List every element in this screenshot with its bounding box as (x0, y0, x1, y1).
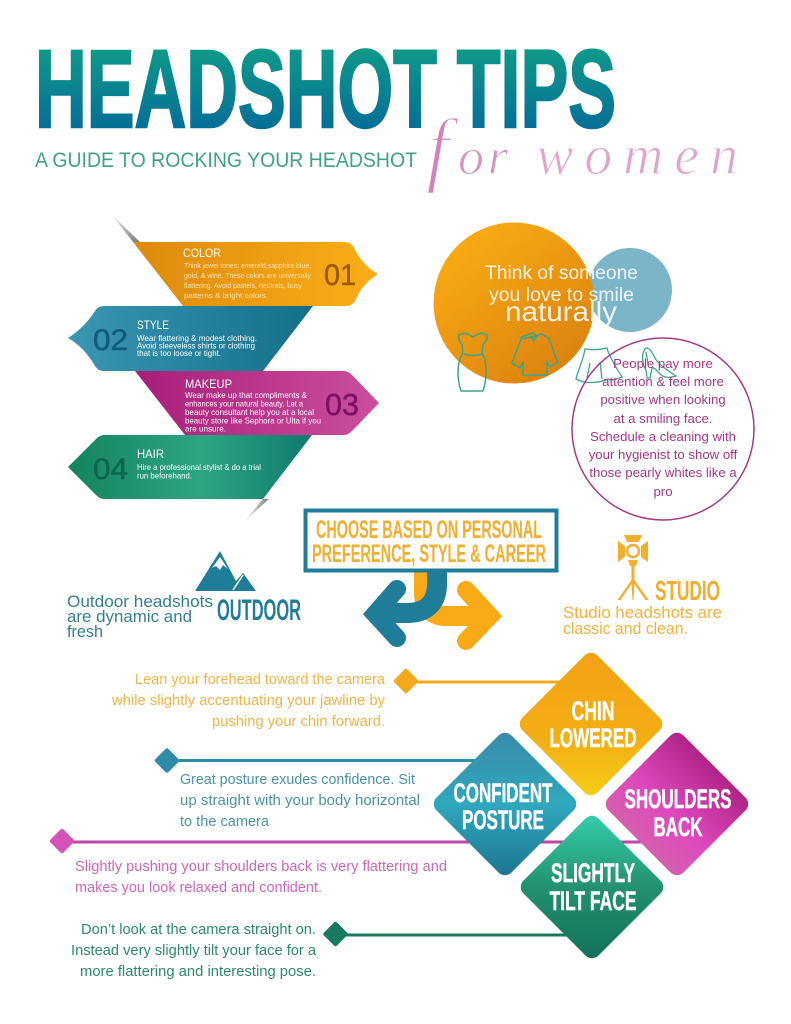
ribbon: makeup: are unsure. (185, 424, 226, 434)
ribbon: color: patterns & bright colors. (184, 291, 268, 300)
panel: numbered ribbons (68, 213, 379, 523)
ribbon: makeup: MAKEUP (185, 379, 232, 391)
arrow: teal left (373, 572, 437, 638)
ribbon: style: that is too loose or tight. (137, 349, 221, 358)
choose text: CHOOSE BASED ON PERSONAL (316, 516, 542, 544)
teal circle (588, 248, 672, 332)
tip text: posture: to the camera (180, 814, 270, 830)
tip text: tilt: Don’t look at the camera straight on. (81, 922, 316, 938)
icon: studio light (618, 535, 648, 600)
ribbon: hair: 04 (93, 453, 128, 486)
panel: studio (563, 535, 722, 638)
ribbon: hair (68, 435, 312, 499)
script heading: for women: f (426, 102, 460, 195)
arrow: orange right (424, 572, 490, 641)
ribbon: color: gold, & wine. These colors are universally (184, 271, 311, 280)
circle text: attention & feel more (602, 374, 724, 389)
diamond: chin lowered (516, 649, 666, 799)
tip text: posture: Great posture exudes confidence. Sit (180, 772, 415, 788)
subtitle: A GUIDE TO ROCKING YOUR HEADSHOT (35, 149, 417, 172)
ribbon: makeup: enhances your natural beauty. Let a (185, 400, 303, 408)
circle text: your hygienist to show off (589, 447, 738, 462)
script heading: for women: women (536, 125, 738, 187)
circle text: People pay more (613, 356, 713, 371)
tip text: chin: Lean your forehead toward the camera (135, 672, 386, 688)
tip text: shoulders: makes you look relaxed and confident. (75, 880, 322, 896)
diamond: slightly tilt face: SLIGHTLY (551, 858, 635, 888)
icon: dress (458, 333, 487, 391)
tip text: posture: up straight with your body horizontal (180, 793, 420, 809)
ribbon: color: flattering. Avoid pastels, neutrals, busy (184, 281, 302, 290)
circle text: at a smiling face. (614, 411, 712, 426)
ribbon: hair: run beforehand. (137, 470, 192, 480)
outdoor text: fresh (67, 622, 103, 641)
connector: teal (154, 747, 482, 774)
ribbon: style: Wear flattering & modest clothing. (137, 334, 257, 343)
ribbon: makeup: Wear make up that compliments & (185, 391, 308, 400)
tip text: chin: while slightly accentuating your jawline by (111, 693, 386, 709)
diamond: chin lowered: LOWERED (550, 723, 636, 753)
choose box (306, 510, 556, 570)
circle text: those pearly whites like a (589, 465, 737, 480)
ribbon: makeup: 03 (325, 387, 359, 422)
icon: skirt top (576, 348, 622, 383)
ribbon: hair: Hire a professional stylist & do a trial (137, 462, 261, 472)
icon: shoe (643, 348, 676, 378)
connector: green (322, 921, 570, 947)
ribbon: color: 01 (324, 259, 356, 292)
connector: yellow (393, 668, 565, 694)
ribbon: style (68, 306, 313, 371)
icon: blouse (512, 333, 558, 375)
ribbon: color (133, 242, 378, 306)
purple text circle (572, 338, 754, 520)
panel: smile circles (434, 222, 754, 520)
ribbon: hair: HAIR (137, 449, 164, 461)
outdoor text: Outdoor headshots (67, 592, 213, 611)
tip text: shoulders: Slightly pushing your shoulders back is very flattering and (75, 859, 447, 875)
ribbon: style: Avoid sleeveless shirts or clothing (137, 342, 255, 350)
diamond: confident posture: CONFIDENT (454, 778, 553, 808)
panel: choose box and arrows (306, 510, 556, 641)
tip text: tilt: Instead very slightly tilt your face for a (71, 943, 317, 959)
diamond: slightly tilt face: TILT FACE (550, 886, 636, 916)
panel: outdoor (67, 551, 301, 641)
circle text: Schedule a cleaning with (590, 429, 736, 444)
ribbon: color: COLOR (183, 248, 221, 260)
smile text: Think of someone (485, 263, 638, 284)
script heading: for women (426, 102, 738, 195)
connector: magenta (49, 828, 642, 854)
diamond: chin lowered: CHIN (572, 696, 614, 726)
icon: mountain (195, 551, 256, 591)
panel: choose box and arrows: PREFERENCE, STYLE & CAREER (312, 540, 546, 568)
diamond: shoulders back: SHOULDERS (624, 784, 732, 814)
diamond: slightly tilt face (517, 812, 667, 962)
smile text: you love to smile (489, 285, 634, 306)
studio heading: STUDIO (655, 575, 720, 606)
ribbon: makeup (135, 371, 379, 435)
diamond: shoulders back: BACK (654, 812, 703, 842)
diamond: confident posture: POSTURE (462, 805, 544, 835)
tip text: chin: pushing your chin forward. (212, 714, 385, 730)
diamond: confident posture (430, 729, 580, 879)
circle text: pro (653, 484, 673, 499)
diamond: shoulders back (602, 729, 752, 879)
ribbon: style: STYLE (137, 320, 169, 332)
ribbon: makeup: beauty store like Sephora or Ulta if you (185, 416, 321, 426)
ribbon: style: 02 (93, 324, 128, 357)
orange circle (434, 222, 594, 384)
script heading: for women: or (458, 129, 509, 186)
circle text: positive when looking (600, 392, 726, 407)
outdoor text: are dynamic and (67, 607, 192, 626)
outdoor heading: OUTDOOR (217, 594, 301, 627)
tip text: tilt: more flattering and interesting pose. (80, 964, 316, 980)
panel: pose tips (49, 649, 752, 980)
studio text: classic and clean. (563, 620, 688, 638)
ribbon: makeup: beauty consultant help you at a local (185, 408, 314, 417)
studio text: Studio headshots are (563, 604, 722, 622)
ribbon: color: Think jewel tones: emerald,sapphire blue, (184, 261, 311, 270)
smile text: naturally (505, 296, 617, 327)
